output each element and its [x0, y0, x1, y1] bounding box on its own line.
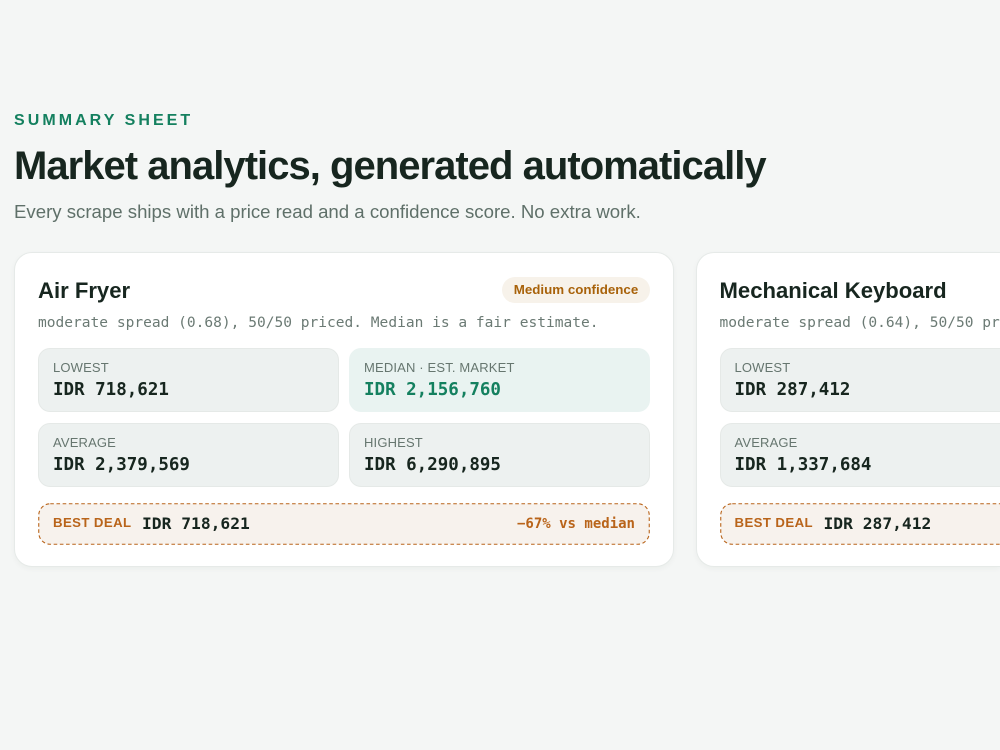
- stat: highest: [349, 423, 650, 487]
- panel: Air Fryer card: [14, 252, 674, 567]
- stat: highest: IDR 6,290,895: [364, 454, 501, 474]
- best deal strip: IDR 718,621: [142, 514, 250, 533]
- stat: median: IDR 2,156,760: [364, 380, 501, 400]
- product name: Air Fryer: [38, 278, 130, 303]
- stat: lowest: [720, 348, 1000, 412]
- stat: average: IDR 1,337,684: [734, 454, 871, 474]
- best deal strip: BEST DEAL: [734, 515, 813, 530]
- stat: lowest: [38, 348, 339, 412]
- stat: median: MEDIAN · EST. MARKET: [364, 360, 515, 375]
- confidence badge: [502, 277, 650, 303]
- stat: lowest: LOWEST: [53, 360, 109, 375]
- best deal strip: [38, 503, 650, 545]
- best deal strip: BEST DEAL: [53, 515, 132, 530]
- product name: Mechanical Keyboard: [720, 278, 947, 303]
- stat: average: IDR 2,379,569: [53, 454, 190, 474]
- subtitle: Every scrape ships with a price read and a confidence score. No extra work.: [14, 201, 641, 222]
- stat: average: AVERAGE: [734, 435, 798, 450]
- best deal strip: IDR 287,412: [824, 514, 931, 533]
- stat: lowest: IDR 718,621: [53, 380, 169, 400]
- spread note: moderate spread (0.68), 50/50 priced. Median is a fair estimate.: [38, 314, 599, 331]
- best deal strip: [720, 503, 1000, 545]
- confidence badge: Medium confidence: [514, 282, 638, 297]
- stat: average: [38, 423, 339, 487]
- title: Market analytics, generated automatically: [14, 144, 766, 188]
- stat: highest: HIGHEST: [364, 435, 423, 450]
- stat: average: AVERAGE: [53, 435, 116, 450]
- stat: lowest: LOWEST: [734, 360, 790, 375]
- stat: median: [349, 348, 650, 412]
- eyebrow label: SUMMARY SHEET: [14, 112, 193, 129]
- stat: average: [720, 423, 1000, 487]
- stat: lowest: IDR 287,412: [734, 380, 850, 400]
- panel: Mechanical Keyboard card: [696, 252, 1000, 567]
- best deal strip: −67% vs median: [517, 516, 635, 532]
